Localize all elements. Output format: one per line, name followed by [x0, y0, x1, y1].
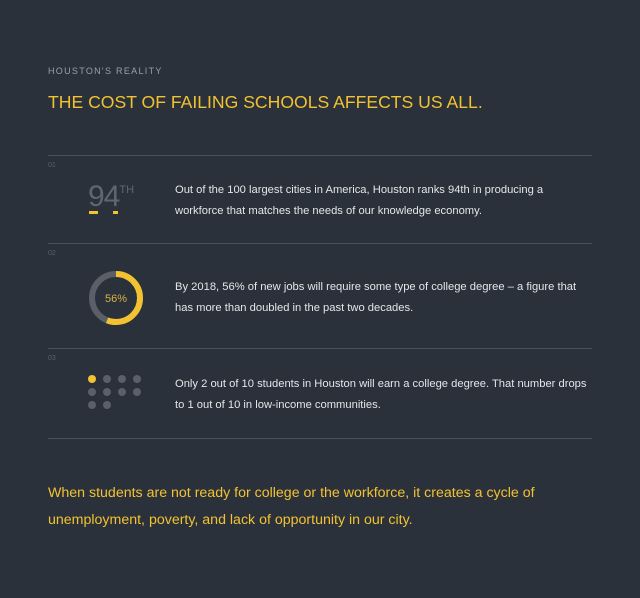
- eyebrow: HOUSTON'S REALITY: [48, 66, 163, 76]
- stat 03: Only 2 out of 10 students in Houston will earn a college degree. That number drops to 1 out of 10 in low-income communities.: [175, 378, 586, 411]
- icon: donut 56%: [89, 271, 143, 325]
- icon: dots: [88, 375, 141, 409]
- icon: donut 56%: 56%: [105, 293, 127, 305]
- stat 01: 01: [48, 162, 56, 169]
- stat 02: By 2018, 56% of new jobs will require some type of college degree – a figure that has more than doubled in the past two decades.: [175, 281, 576, 314]
- stat 03: [48, 355, 586, 411]
- stat 01: [48, 162, 544, 217]
- title: THE COST OF FAILING SCHOOLS AFFECTS US ALL.: [48, 92, 483, 112]
- stat 03: 03: [48, 355, 56, 362]
- closing statement: When students are not ready for college or the workforce, it creates a cycle of unemployment, poverty, and lack of opportunity in our city.: [48, 485, 535, 528]
- stat 01: Out of the 100 largest cities in America, Houston ranks 94th in producing a workforce that matches the needs of our knowledge economy.: [175, 184, 543, 217]
- icon: 94th: 94TH: [88, 180, 134, 213]
- stat 02: [48, 250, 576, 325]
- stat 02: 02: [48, 250, 56, 257]
